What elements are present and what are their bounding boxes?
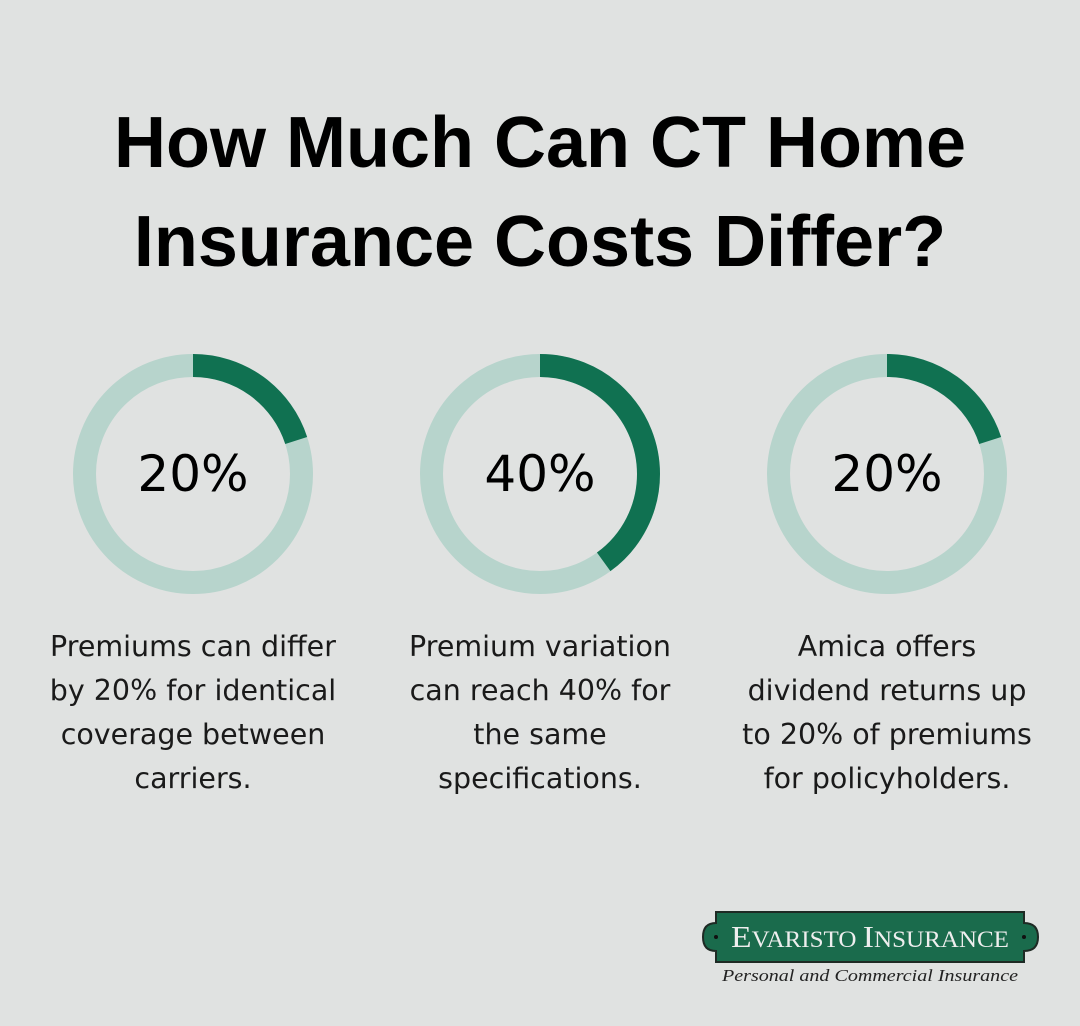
caption 2	[409, 630, 671, 795]
donut 1: 20%: 20%	[137, 445, 249, 503]
caption 2: Premium variation	[409, 630, 671, 663]
caption 2: specifications.	[438, 762, 642, 795]
caption 3	[742, 630, 1032, 795]
caption 1	[50, 630, 336, 795]
donut 2: 40%: 40%	[484, 445, 596, 503]
donut 2: 40%	[420, 354, 660, 594]
caption 1: coverage between	[61, 718, 325, 751]
logo	[702, 911, 1039, 985]
donut 3: 20%	[767, 354, 1007, 594]
caption 1: by 20% for identical	[50, 674, 336, 707]
title: Insurance Costs Differ?	[134, 202, 946, 282]
caption 2: can reach 40% for	[410, 674, 670, 707]
caption 3: Amica offers	[798, 630, 976, 663]
donut 3: 20%: 20%	[831, 445, 943, 503]
caption 3: for policyholders.	[764, 762, 1010, 795]
caption 1: Premiums can differ	[50, 630, 336, 663]
logo: Personal and Commercial Insurance	[721, 966, 1019, 985]
title	[114, 103, 966, 282]
title: How Much Can CT Home	[114, 103, 966, 183]
caption 2: the same	[473, 718, 607, 751]
caption 1: carriers.	[134, 762, 252, 795]
donut 1: 20%	[73, 354, 313, 594]
caption 3: to 20% of premiums	[742, 718, 1032, 751]
caption 3: dividend returns up	[748, 674, 1026, 707]
logo: EVARISTO INSURANCE	[731, 919, 1009, 954]
